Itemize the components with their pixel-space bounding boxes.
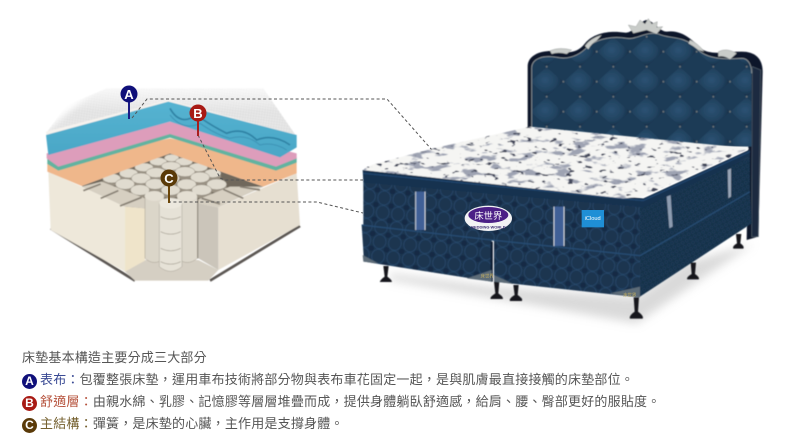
side stripes <box>416 168 731 246</box>
foam block left <box>48 172 145 272</box>
pillow-top band <box>363 149 750 207</box>
diagram: mattress cross-section <box>30 80 307 281</box>
intro heading: 床墊基本構造主要分成三大部分 <box>22 350 207 365</box>
bed photo <box>360 19 763 323</box>
marker B <box>190 104 206 136</box>
item B: comfort layer: B <box>25 396 34 410</box>
right side of base <box>640 191 752 297</box>
base and floor <box>51 226 300 281</box>
floral pattern <box>363 126 746 199</box>
mattress top surface <box>30 80 307 137</box>
foam layer green <box>47 133 297 171</box>
marker C <box>160 170 178 203</box>
leader line A <box>132 99 432 150</box>
foam interior shadow <box>82 153 263 258</box>
floor shadow <box>390 243 753 323</box>
pocket springs <box>103 154 227 198</box>
legs <box>380 234 744 319</box>
leader line B <box>198 135 363 180</box>
marker A: A <box>124 87 134 102</box>
foam layer orange <box>47 138 297 187</box>
iCloud tag: iCloud <box>585 216 601 222</box>
item A: cover: 表布：包覆整張床墊，運用車布技術將部分物與表布車花固定一起，是與肌膚最直接接觸的床墊部位。 <box>40 372 634 387</box>
base right section <box>494 240 640 297</box>
base left section <box>362 225 492 282</box>
marker A <box>120 86 138 119</box>
foam layer pink <box>47 122 297 167</box>
brand logo <box>465 206 512 231</box>
headboard ornament <box>550 19 737 59</box>
iCloud tag <box>582 210 604 227</box>
brand logo: BEDDING WORLD <box>471 224 506 229</box>
corner plates <box>363 255 640 297</box>
leader line C <box>168 202 363 213</box>
item C: main structure: 主結構：彈簧，是床墊的心臟，主作用是支撐身體。 <box>40 416 344 431</box>
foam layer blue <box>46 102 297 157</box>
foam block right <box>198 173 300 270</box>
item C: main structure: C <box>25 418 34 432</box>
corner plate brand text <box>481 272 637 299</box>
mattress top <box>363 127 749 198</box>
right side of mattress <box>640 157 750 256</box>
front coil columns <box>145 191 197 271</box>
front of mattress <box>363 182 640 256</box>
item B: comfort layer: 舒適層：由親水綿、乳膠、記憶膠等層層堆疊而成，提供身體躺臥舒適感，給肩、腰、臀部更好的服貼度。 <box>40 394 660 409</box>
brand logo: 床世界 <box>474 210 502 221</box>
headboard <box>528 19 763 240</box>
corner plate brand text: 床世界 <box>623 292 637 299</box>
item A: cover: A <box>25 374 34 388</box>
marker B: B <box>193 106 203 121</box>
marker C: C <box>164 171 174 186</box>
corner plate brand text: 床世界 <box>481 272 494 279</box>
mattress side and base <box>360 123 753 319</box>
